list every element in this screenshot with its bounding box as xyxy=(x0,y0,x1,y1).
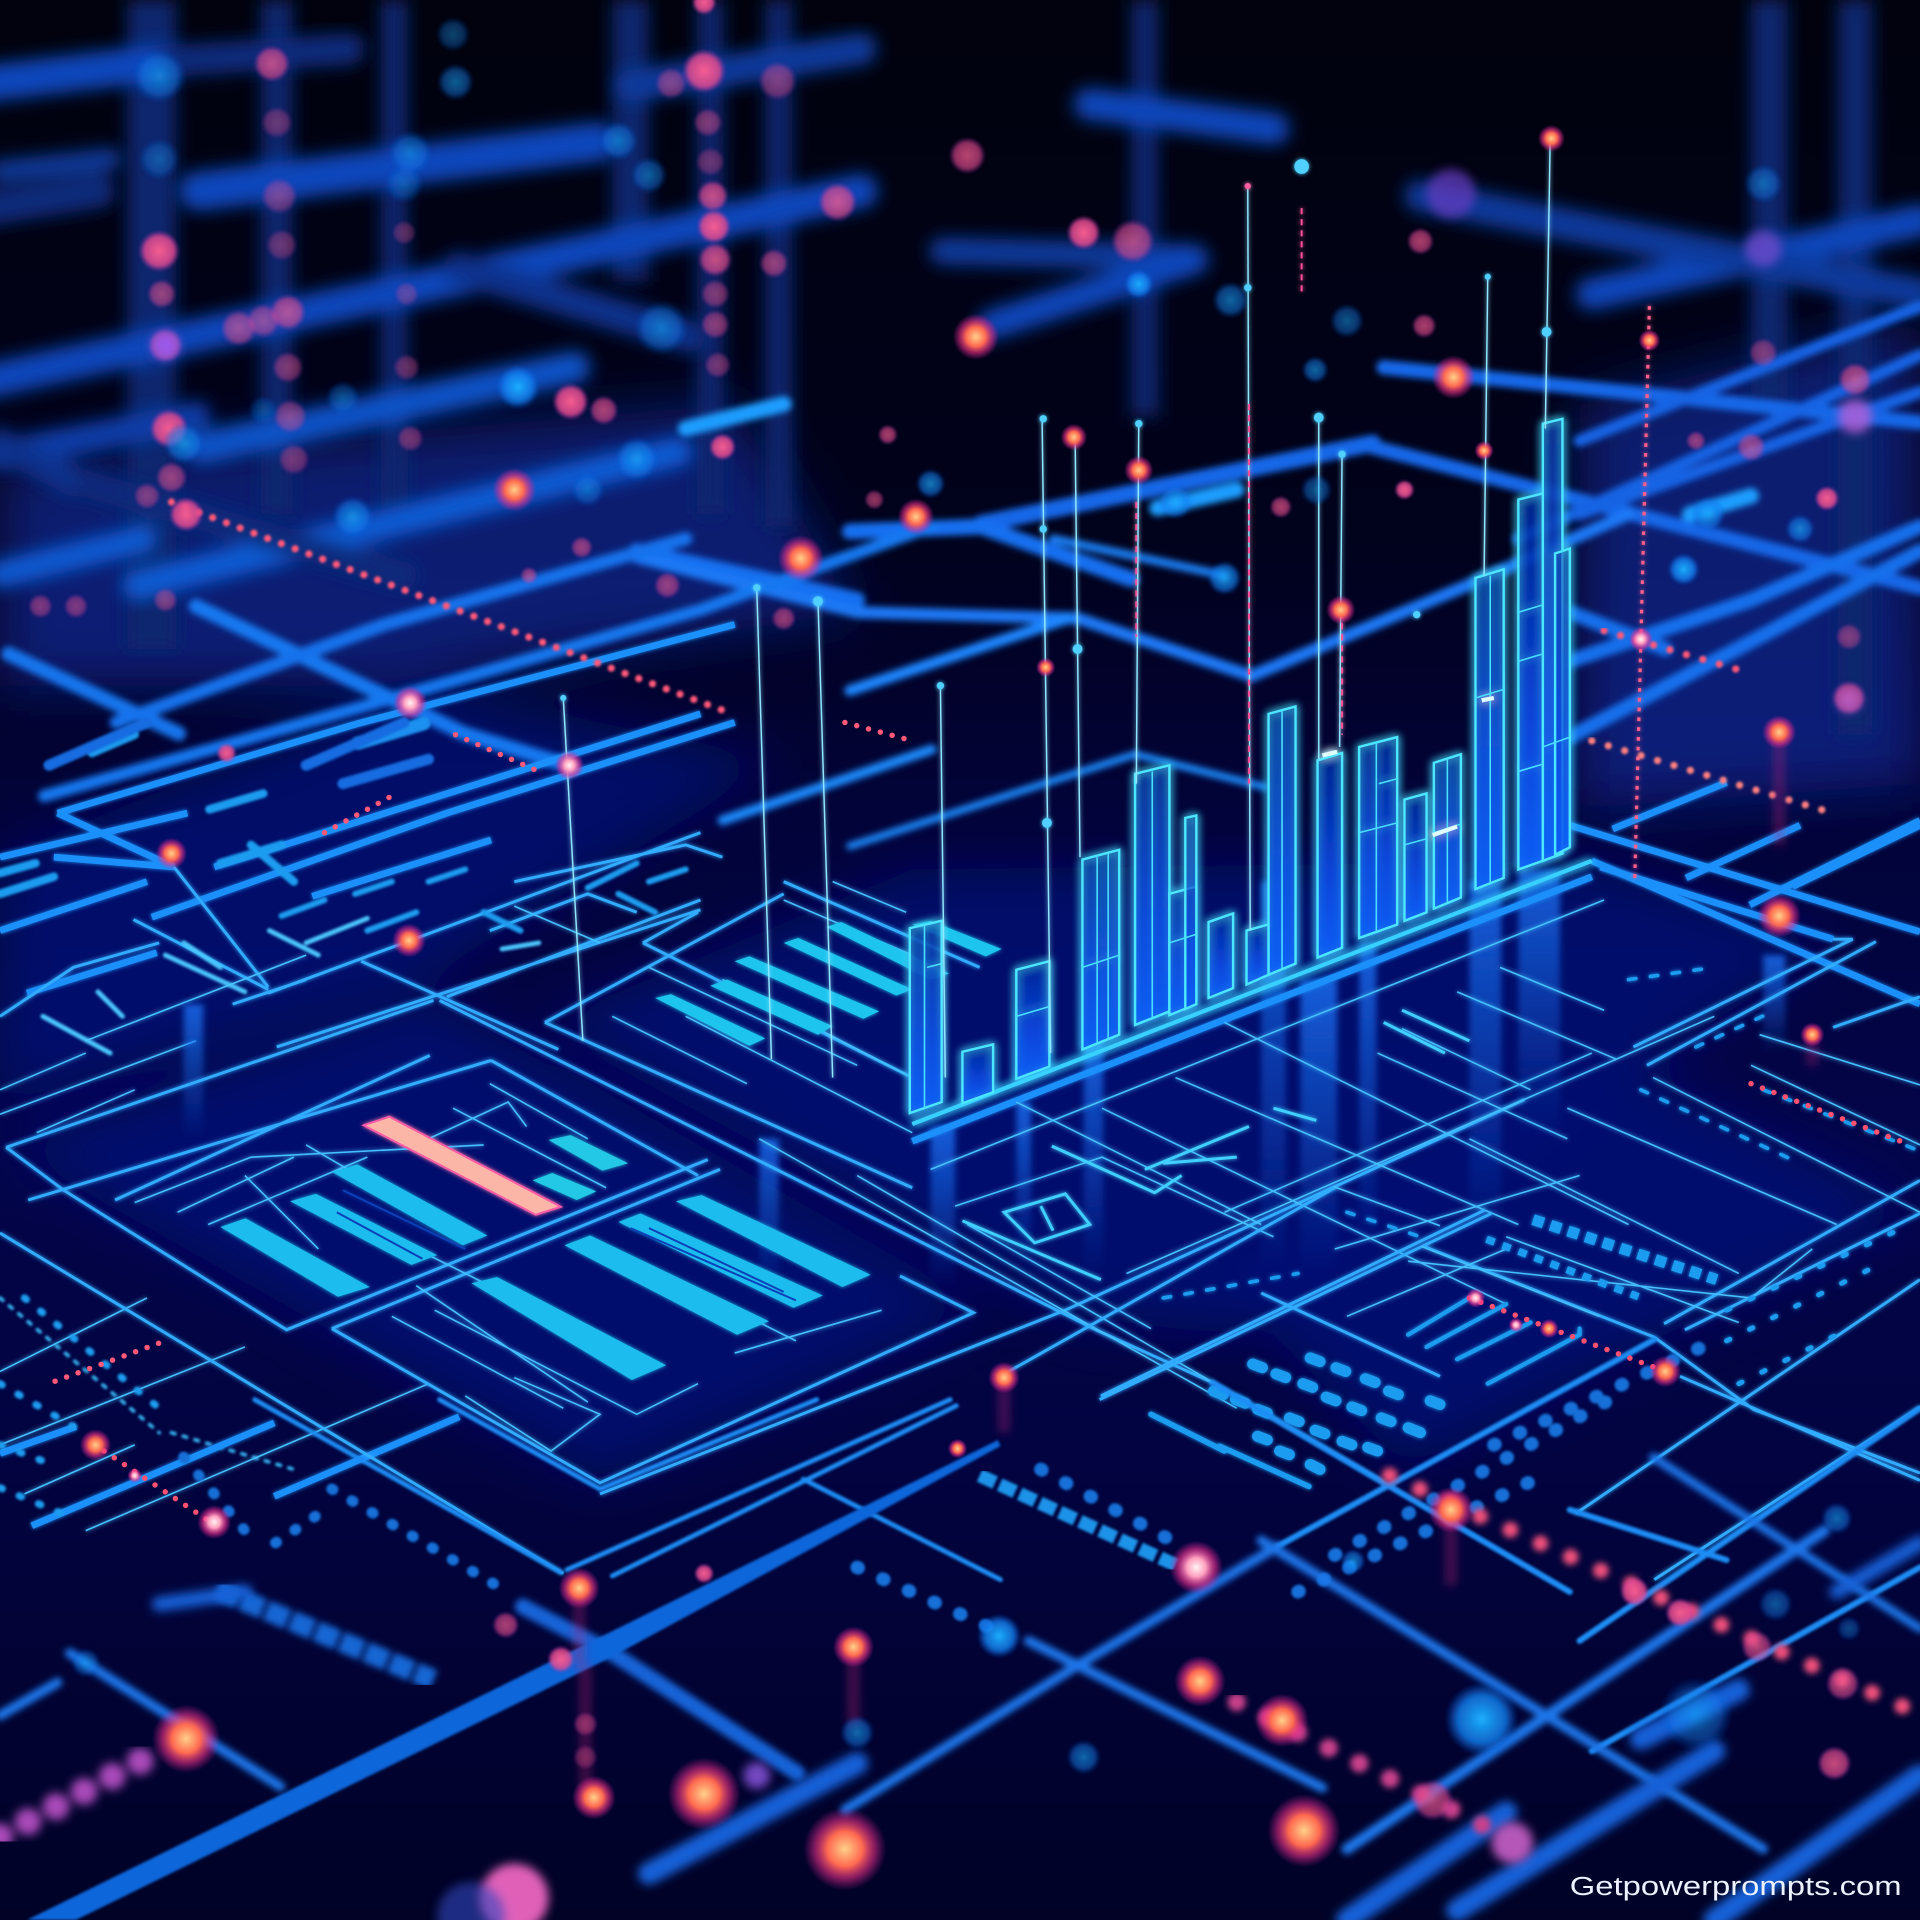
foreground grid lines xyxy=(0,1340,1920,1920)
antenna lines xyxy=(563,138,1649,1078)
bright chart highlights xyxy=(1322,698,1494,835)
chart baseline xyxy=(912,861,1592,1124)
bar inner details xyxy=(924,576,1570,1108)
left pill blocks xyxy=(0,722,686,1469)
blurred background grid at top xyxy=(0,49,1920,585)
cyan data bars xyxy=(220,1135,871,1380)
panel outline xyxy=(0,1000,1524,1573)
antenna tip nodes xyxy=(560,159,1551,828)
dotted pink signal lines xyxy=(0,502,1920,1837)
right circuit area xyxy=(1007,782,1920,1580)
lower-left circuitry xyxy=(0,1298,459,1531)
bar detail marks xyxy=(337,1190,796,1300)
red light trails under nodes xyxy=(579,741,1812,1788)
keyboard-like cluster xyxy=(1213,1358,1440,1469)
white-hot glow nodes xyxy=(127,627,1653,1594)
thick foreground beam left xyxy=(27,1440,1000,1920)
left circuit area xyxy=(0,624,735,1531)
bars xyxy=(910,419,1570,1113)
server-row cluster xyxy=(1533,1220,1717,1280)
bar chart xyxy=(910,419,1592,1124)
foreground dashed blocks xyxy=(184,1347,1702,1680)
blurred mid grid lines xyxy=(9,306,1920,846)
vertical reflections under chart xyxy=(184,869,1785,1286)
panel: main lower-left dashboard xyxy=(0,1000,1524,1573)
transistor ladder cluster xyxy=(1408,1298,1580,1384)
blurred background columns xyxy=(152,0,1855,735)
soft navy glow behind panels xyxy=(0,318,1920,1483)
highlighted pink bar xyxy=(364,1117,561,1215)
chart platform circuitry xyxy=(545,825,1920,1482)
watermark: Getpowerprompts.com xyxy=(1570,1873,1902,1901)
thick left lines xyxy=(0,624,735,1133)
